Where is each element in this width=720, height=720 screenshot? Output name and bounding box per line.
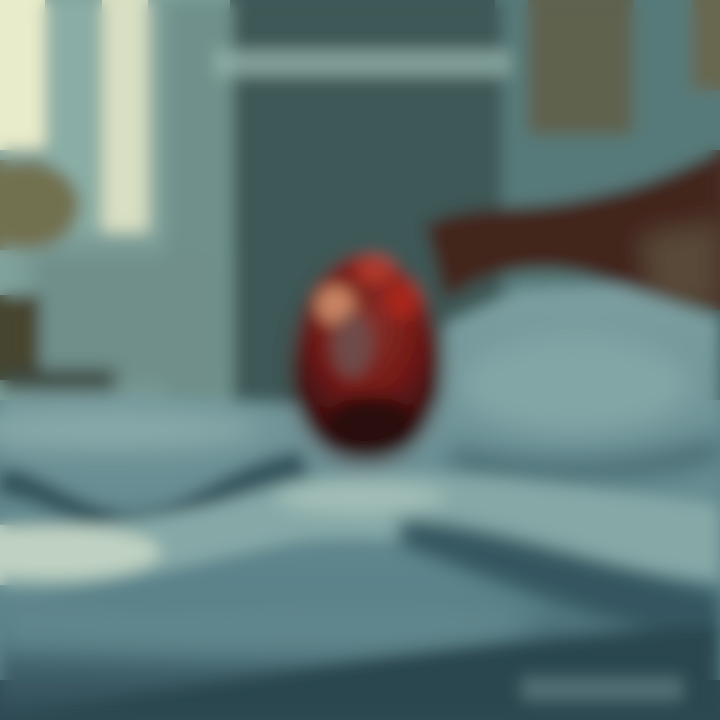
- bug: [294, 255, 440, 463]
- headboard: [425, 150, 720, 310]
- wall pictures: [528, 0, 720, 135]
- window and curtains: [0, 0, 232, 420]
- bedside lamp: [0, 161, 115, 390]
- bottom caption strip: [522, 678, 682, 700]
- top caption strip: [215, 50, 510, 76]
- bedding: [0, 285, 720, 720]
